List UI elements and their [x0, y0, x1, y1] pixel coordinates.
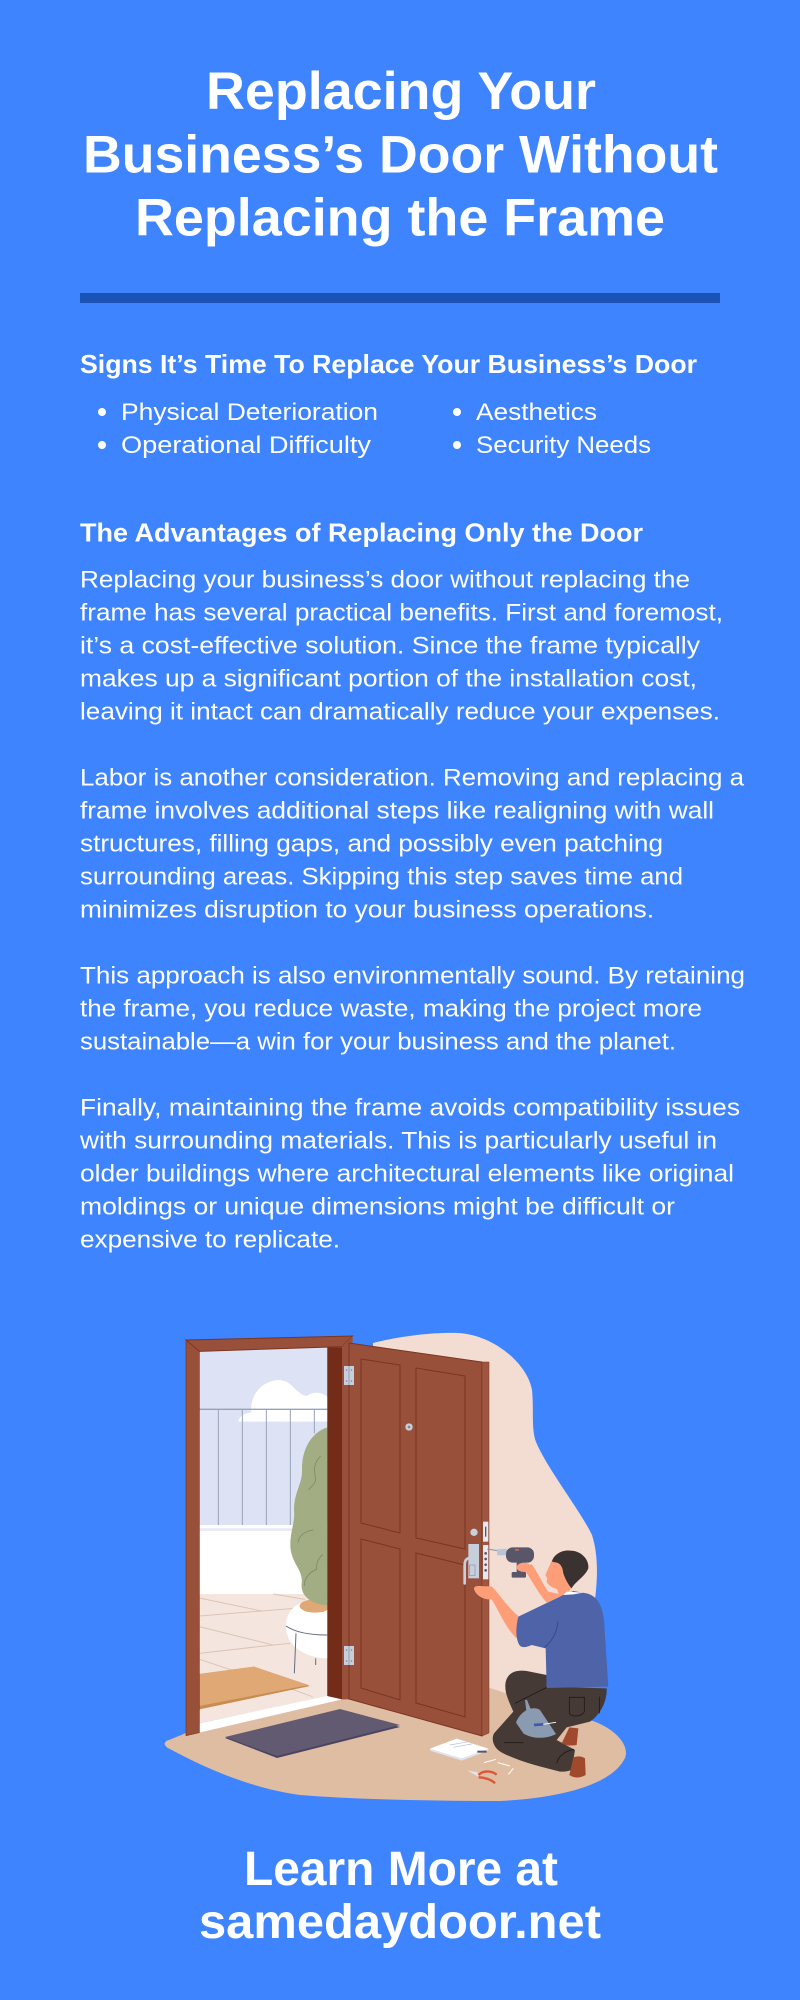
door leaf: [344, 1343, 489, 1736]
worker shoes: [562, 1727, 578, 1746]
list: signs it's time to replace: Operational Difficulty: [121, 432, 371, 459]
worker face and neck: [545, 1560, 573, 1597]
drill: [487, 1547, 534, 1578]
paragraph: labor: surrounding areas. Skipping this step saves time and: [80, 864, 683, 891]
title divider bar: [80, 293, 720, 303]
threshold: [199, 1696, 342, 1733]
paragraph: labor: structures, filling gaps, and possibly even patching: [80, 831, 663, 858]
paragraph: compatibility: older buildings where architectural elements like original: [80, 1161, 734, 1188]
heading: advantages: The Advantages of Replacing Only the Door: [80, 518, 643, 548]
worker pants: [493, 1671, 607, 1772]
paragraph: compatibility: Finally, maintaining the frame avoids compatibility issues: [80, 1095, 740, 1122]
lock and handle: [465, 1522, 488, 1583]
paragraph: compatibility: expensive to replicate.: [80, 1227, 340, 1254]
dark doormat outside: [225, 1709, 400, 1758]
heading: signs: Signs It’s Time To Replace Your Business’s Door: [80, 349, 697, 379]
tool pouch: [516, 1700, 556, 1738]
floor: [165, 1688, 626, 1801]
list: signs it's time to replace: [98, 399, 651, 459]
paragraph: labor: minimizes disruption to your business operations.: [80, 897, 654, 924]
screws: [484, 1759, 513, 1774]
list: signs it's time to replace: Physical Deterioration: [121, 399, 378, 426]
list: signs it's time to replace: Security Needs: [476, 432, 651, 459]
paragraph: labor: Labor is another consideration. Removing and replacing a: [80, 765, 745, 792]
balcony railing: [199, 1409, 327, 1525]
paragraph: cost: frame has several practical benefits. First and foremost,: [80, 600, 723, 627]
plant: [290, 1427, 327, 1605]
title: [83, 62, 718, 248]
inner jamb: [327, 1347, 342, 1699]
paragraph: labor: frame involves additional steps like realigning with wall: [80, 798, 714, 825]
worker arm on door: [474, 1586, 518, 1638]
pants seams: [504, 1687, 599, 1763]
balcony wall: [199, 1525, 327, 1594]
paragraph: environment: sustainable—a win for your business and the planet.: [80, 1029, 676, 1056]
plant stand: [286, 1626, 327, 1673]
paragraph: cost: [80, 567, 723, 726]
door frame: [186, 1336, 353, 1351]
paragraph: compatibility: [79, 1095, 740, 1254]
doormat inside: [199, 1667, 310, 1709]
call to action: samedaydoor.net: [199, 1896, 601, 1949]
sky: [199, 1347, 327, 1527]
patio floor: [199, 1594, 327, 1723]
peephole: [405, 1423, 413, 1431]
door hardware and worker: [405, 1423, 608, 1783]
worker hair: [552, 1550, 588, 1588]
paragraph: environment: [80, 963, 745, 1056]
pink background blob: [373, 1333, 597, 1720]
call to action: [199, 1843, 601, 1949]
paragraph: environment: This approach is also environmentally sound. By retaining: [80, 963, 745, 990]
paragraph: compatibility: with surrounding materials. This is particularly useful in: [79, 1128, 717, 1155]
paragraph: labor: [80, 765, 745, 924]
call to action: Learn More at: [244, 1843, 558, 1896]
paragraph: cost: Replacing your business’s door without replacing the: [80, 567, 690, 594]
illustration: worker installing a door: [165, 1333, 626, 1801]
plant pot: [286, 1599, 327, 1658]
pliers: [467, 1771, 497, 1783]
worker raised arm: [524, 1564, 563, 1603]
paragraph: cost: makes up a significant portion of the installation cost,: [80, 666, 697, 693]
paragraph: cost: leaving it intact can dramatically reduce your expenses.: [80, 699, 720, 726]
title: Business’s Door Without: [83, 126, 718, 184]
list: signs it's time to replace: Aesthetics: [476, 399, 597, 426]
paragraph: compatibility: moldings or unique dimensions might be difficult or: [80, 1194, 675, 1221]
worker shirt: [516, 1591, 608, 1688]
cloud: [238, 1380, 327, 1422]
door opening scene: [186, 1336, 353, 1736]
hinges: [344, 1366, 354, 1665]
title: Replacing the Frame: [135, 188, 665, 248]
title: Replacing Your: [206, 62, 596, 121]
paragraph: environment: the frame, you reduce waste, making the project more: [80, 996, 702, 1023]
hardware box: [430, 1739, 488, 1761]
paragraph: cost: it’s a cost-effective solution. Since the frame typically: [80, 633, 700, 660]
